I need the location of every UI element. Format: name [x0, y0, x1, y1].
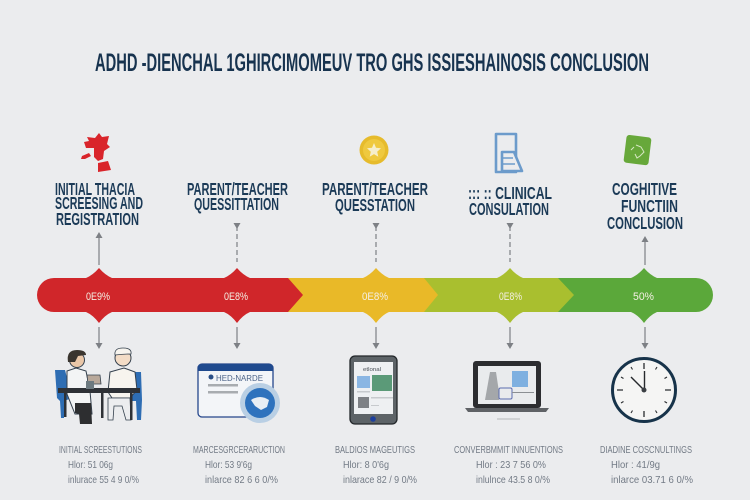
- icon: gold star coin: [360, 136, 388, 164]
- doctor head: [70, 352, 84, 368]
- doctor coat: [67, 368, 92, 414]
- caption: step 2: inlarce 82 6 6 0/%: [205, 474, 278, 486]
- card logo: [208, 374, 214, 380]
- timeline bar: [37, 268, 713, 323]
- card title: HED-NARDE: [216, 374, 263, 383]
- caption: step 2: [193, 444, 285, 486]
- screen: [354, 362, 393, 414]
- screen line: [512, 392, 534, 394]
- screen: [478, 366, 536, 404]
- green tile: [372, 375, 392, 391]
- mug: [86, 381, 94, 389]
- arrow: step 1 up: [96, 232, 102, 265]
- marker: step 2: [224, 268, 250, 323]
- hour hand: [631, 377, 644, 390]
- icon: green rounded tile: [623, 135, 652, 165]
- device on desk: [87, 375, 101, 384]
- value: step 1: 0E9%: [86, 291, 110, 303]
- hub: [642, 388, 646, 392]
- marker: step 4: [497, 268, 523, 323]
- left chair: [55, 370, 72, 418]
- minute hand: [644, 371, 646, 390]
- body: [350, 356, 397, 424]
- caption: step 1: [59, 444, 142, 486]
- heading: step 5: COGHITIVE: [612, 179, 677, 199]
- text lines: [357, 391, 393, 406]
- heading: step 2: [187, 179, 288, 214]
- marker: step 5: [631, 268, 657, 323]
- home button: [370, 416, 376, 422]
- icon: red star: [81, 133, 111, 172]
- arrow: step 4 lower: [506, 327, 514, 349]
- heading: step 3: PARENT/TEACHER: [322, 179, 428, 199]
- arrow: step 3 down dashed: [372, 223, 380, 262]
- arrow: step 1 lower: [96, 327, 102, 349]
- segment: yellow: [285, 278, 438, 312]
- segment: red: [37, 278, 303, 312]
- illustration: doctor and patient at desk: [55, 348, 142, 424]
- seal: [240, 383, 280, 423]
- heading: step 4: ::: :: CLINICAL: [468, 183, 552, 203]
- segment: green: [555, 278, 713, 312]
- caption: step 5: [600, 444, 693, 486]
- desk legs: [64, 393, 132, 420]
- illustration: tablet app: [350, 356, 397, 424]
- caption: step 4: inlulnce 43.5 8 0/%: [476, 474, 550, 486]
- heading: step 4: [468, 183, 552, 219]
- caption: step 2: MARCESGRCERARUCTION: [193, 444, 285, 456]
- desk top: [58, 388, 140, 393]
- base: [465, 408, 549, 412]
- arrow: step 3 lower: [372, 327, 380, 349]
- caption: step 3: BALDIOS MAGEUTIGS: [335, 444, 415, 456]
- marker: step 3: [363, 268, 389, 323]
- value: step 5: 50%: [633, 291, 654, 303]
- segment: lime: [421, 278, 574, 312]
- minor ticks: [621, 367, 667, 413]
- heading: step 5: FUNCTIIN: [621, 196, 678, 216]
- caption: step 1: inlurace 55 4 9 0/%: [68, 474, 139, 486]
- illustration: laptop: [465, 361, 549, 419]
- arrow: step 2 down dashed: [234, 223, 240, 262]
- heading: step 3: [322, 179, 428, 215]
- marker: step 1: [86, 268, 112, 323]
- caption: step 5: inlarce 03.71 6 0/%: [611, 474, 693, 486]
- heading: step 1: INITIAL THACIA: [55, 179, 135, 199]
- arrow: step 5 up: [642, 236, 648, 265]
- card header: [198, 364, 273, 371]
- doctor hair: [68, 350, 86, 362]
- illustration: ID card with seal: [198, 364, 280, 423]
- caption: step 4: [454, 444, 563, 486]
- base caption: [497, 418, 520, 420]
- caption: step 1: Hlor: 51 06g: [68, 459, 113, 471]
- caption: step 3: Hlor: 8 0'6g: [343, 459, 389, 471]
- card lines: [208, 384, 238, 394]
- heading: step 4: CONSULATION: [469, 199, 549, 219]
- patient torso: [108, 368, 137, 398]
- heading: step 2: PARENT/TEACHER: [187, 179, 288, 199]
- caption: step 5: DIADINE COSCNULTINGS: [600, 444, 692, 456]
- doctor legs: [75, 403, 92, 424]
- heading: step 1: REGISTRATION: [56, 209, 139, 229]
- arrow: step 4 down dashed: [506, 223, 514, 262]
- caption: step 1: INITIAL SCREESTUTIONS: [59, 444, 142, 456]
- value: step 3: 0E8%: [362, 291, 388, 303]
- screen box: [499, 388, 512, 399]
- grey tile: [358, 397, 369, 408]
- hour ticks: [617, 363, 671, 417]
- heading: step 1: SCREESING AND: [55, 193, 143, 213]
- caption: step 4: CONVERBMMIT INNUENTIONS: [454, 444, 563, 456]
- patient head: [115, 350, 131, 366]
- arrow: step 5 lower: [642, 327, 648, 349]
- caption: step 3: [335, 444, 417, 486]
- caption: step 2: Hlor: 53 9'6g: [205, 459, 252, 471]
- screen tile: [512, 371, 528, 387]
- card: [198, 364, 273, 417]
- caption: step 5: Hlor : 41/9g: [611, 459, 660, 471]
- patient legs: [108, 398, 131, 420]
- arrow: step 2 lower: [234, 327, 240, 349]
- heading: step 2: QUESSITTATION: [194, 194, 279, 214]
- heading: step 1: [55, 179, 143, 229]
- caption: step 4: Hlor : 23 7 56 0%: [476, 459, 546, 471]
- illustration: clock: [612, 358, 676, 422]
- value: step 2: 0E8%: [224, 291, 248, 303]
- right chair: [127, 372, 142, 420]
- caption: step 3: inlarace 82 / 9 0/%: [343, 474, 417, 486]
- value: step 4: 0E8%: [499, 291, 522, 303]
- lid: [473, 361, 541, 408]
- screen title: etlonal: [363, 367, 381, 373]
- heading: step 3: QUESSTATION: [335, 195, 415, 215]
- clock face: [612, 358, 676, 422]
- heading: step 5: [607, 179, 683, 233]
- patient cap: [115, 348, 131, 355]
- icon: blue tablet document: [496, 134, 522, 172]
- screen figure: [485, 372, 499, 400]
- heading: step 5: CONCLUSION: [607, 213, 683, 233]
- blue tile: [357, 376, 370, 388]
